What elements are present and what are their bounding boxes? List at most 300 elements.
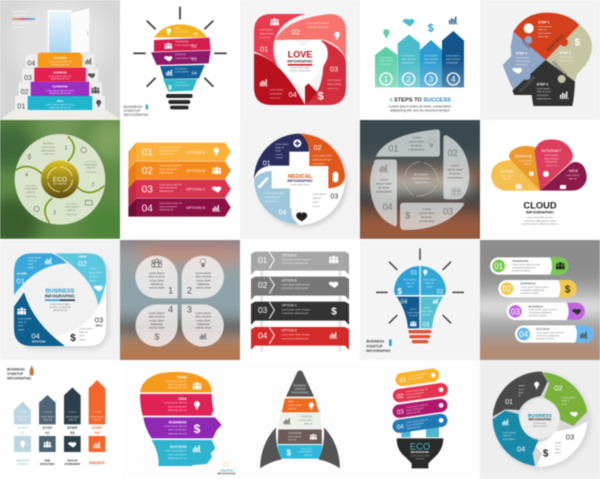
step 4 text: consectetur <box>516 63 528 66</box>
heart center: Lorem ipsum dolor <box>290 67 310 70</box>
band idea: IDEA <box>178 397 187 401</box>
ribbon B: amet consectetur <box>159 168 177 171</box>
ribbon D: amet consectetur <box>159 205 177 208</box>
bottom labels: INVESTORS <box>40 463 55 466</box>
capsule 04 <box>515 325 593 343</box>
option texts: dolor sit <box>68 209 76 212</box>
capsule 01: TEAMWORK <box>512 259 529 263</box>
petal 1: Lorem ipsum <box>149 271 165 275</box>
option texts: OPTION A <box>43 143 54 146</box>
segment 04: consectetur <box>376 190 392 194</box>
segment 05: Lorem ipsum <box>175 84 189 87</box>
lorem: consectetur <box>270 93 282 96</box>
segment 04 blue: amet adipis <box>503 438 515 441</box>
heading <box>12 10 35 29</box>
segment 03: $ <box>70 333 76 344</box>
step: business: Lorem ipsum dolor sit <box>49 75 71 78</box>
segment 02 <box>275 14 346 59</box>
pill 01: 01 <box>399 377 407 384</box>
arrow text: Lorem ipsum <box>446 55 460 58</box>
option texts: adipiscing <box>26 196 37 198</box>
quadrant 03: Lorem <box>423 307 430 310</box>
pill 04 <box>392 413 448 434</box>
segment 02 green: amet <box>562 403 567 406</box>
step 1 text: dolor sit <box>538 29 547 32</box>
panel: head stripes infographic <box>139 371 236 476</box>
section teamwork: Lorem ipsum <box>288 435 302 438</box>
quadrant 04: 04 <box>401 299 408 305</box>
ribbon C: adipiscing elit <box>159 190 174 193</box>
lorem: adipiscing elit sed do <box>307 26 329 29</box>
heading: adipiscing elit <box>53 309 67 312</box>
segment 01 navy: 01 <box>263 161 271 168</box>
section idea <box>282 398 319 412</box>
petal 1: conse ctetur <box>149 278 164 282</box>
segment 01: ipsum dolor <box>409 140 424 144</box>
arrow text: consectetur <box>402 61 414 64</box>
petal 1: 1 <box>168 285 173 295</box>
step numbers: 03 <box>24 75 32 82</box>
arrow base fade <box>375 60 464 87</box>
petal 2: conse ctetur <box>196 278 211 282</box>
segment 02 green: Lorem ipsum <box>562 396 575 399</box>
subtitle: eiusmod tempor incididunt ut labore et <box>522 223 559 226</box>
segment 02 <box>443 135 469 199</box>
capsule 01: Lorem ipsum dolor sit amet <box>512 263 540 266</box>
vertical bands <box>260 268 342 352</box>
option texts: OPTION C <box>66 203 78 205</box>
segment 03 <box>303 40 346 105</box>
labels: 03 <box>330 65 338 74</box>
arrow text: consectetur <box>446 61 458 64</box>
capsule 04: SUCCESS <box>536 327 550 331</box>
segment 01 dark: 01 <box>505 399 513 406</box>
arrow 1 <box>14 402 31 452</box>
lorem blocks: Lorem ipsum dolor <box>313 155 332 158</box>
lamp base: Lorem ipsum dolor <box>410 454 430 457</box>
petal 2: Lorem ipsum <box>196 271 212 275</box>
ribbon B: adipiscing elit <box>159 171 174 174</box>
capsule 02: EARNINGS <box>521 282 536 286</box>
lorem: dolor sit amet <box>327 83 342 86</box>
ring centre: INFOGRAPHIC <box>528 417 552 421</box>
arrow text: Lorem ipsum <box>402 55 415 58</box>
capsule 04: tincidunt ut labore <box>536 337 555 340</box>
capsule 03: BUSINESS <box>529 304 543 308</box>
capsule 03: tincidunt ut labore <box>529 315 548 318</box>
swirl separators <box>16 137 104 223</box>
capsule 01: 01 <box>494 262 504 271</box>
ribbon C <box>136 180 231 198</box>
step: teamwork <box>31 82 89 96</box>
pill 02: adipiscing elit <box>406 395 421 400</box>
panel: four steps to success: 3 <box>429 74 434 84</box>
ribbon C: consectetur adipiscing elit <box>282 312 309 315</box>
segment 03: IDEA <box>96 324 102 328</box>
segment 04: 04 <box>192 71 197 76</box>
arrow 4 <box>442 31 464 87</box>
quadrant step 2 <box>546 25 592 82</box>
segment 04: 04 <box>31 331 41 340</box>
step: idea <box>28 96 92 110</box>
segment 03: Lorem ipsum <box>79 327 93 330</box>
ribbon B <box>136 161 231 179</box>
lamp base: sit amet <box>416 457 424 460</box>
band success: amet, consectetur <box>168 453 187 456</box>
panel: four steps to success: 1 <box>384 74 389 84</box>
heart center: LOVE <box>288 50 312 60</box>
option texts: Lorem ipsum <box>84 163 97 166</box>
heading: 4 STEPS TO SUCCESS <box>389 97 451 103</box>
segment 04 blue: Lorem ipsum <box>503 431 516 434</box>
petal 2 <box>182 256 224 298</box>
step: business <box>34 68 86 82</box>
petal 1: adipiscing <box>151 282 163 286</box>
step 2 text: Lorem ipsum <box>559 56 573 59</box>
ribbon B: consectetur adipiscing elit <box>282 287 309 290</box>
step 1 text: STEP 1 <box>538 20 550 24</box>
panel: business cycle ring infographic <box>480 360 600 479</box>
ribbon C: 03 <box>142 185 153 196</box>
quadrant 02: Lorem ipsum <box>423 279 436 282</box>
puzzle tabs <box>523 36 568 83</box>
ribbon A: adipiscing elit <box>159 153 174 156</box>
icons <box>28 147 92 212</box>
segment 04: BUSINESS <box>175 68 187 70</box>
segment 02: TEAMWORK <box>175 41 189 44</box>
step 4 text: Lorem ipsum <box>516 57 529 60</box>
step 3 text: dolor sit amet <box>537 91 551 94</box>
bottom labels: SIGN AN <box>67 460 78 463</box>
ribbon C: 03 <box>258 305 268 315</box>
heart center: INFOGRAPHIC <box>287 60 313 64</box>
segment 03 <box>151 51 211 65</box>
bulb base <box>166 94 193 109</box>
segment 02 green: dolor sit <box>562 400 570 403</box>
step 2 text: STEP 2 <box>559 51 571 55</box>
band success: SUCCESS <box>170 445 187 449</box>
segment 02: 02 <box>78 259 87 268</box>
segment 02: 02 <box>192 44 197 49</box>
band business: adipiscing elit, sed <box>168 432 187 435</box>
labels: 02 <box>292 27 300 36</box>
diagonal labels: IDEA <box>521 39 532 50</box>
band success: Lorem ipsum dolor sit <box>164 450 187 453</box>
segment 03 white: 03 <box>566 432 574 441</box>
segment 03: dolor sit <box>79 331 88 334</box>
ribbon B <box>251 277 349 300</box>
nose: INFOGRAPHIC <box>291 391 309 394</box>
panel: business template on blurred photo <box>359 119 481 240</box>
icons: $ <box>575 37 581 48</box>
diagonal labels: BUSINESS <box>546 33 565 52</box>
segment 01 <box>154 24 207 37</box>
band business: $ <box>194 422 201 436</box>
option texts: dolor sit amet <box>41 149 56 152</box>
panel: rocket infographic <box>259 370 341 469</box>
option texts: adipiscing <box>43 154 54 156</box>
option texts: Lorem ipsum <box>42 146 55 149</box>
fins <box>260 427 340 468</box>
band business: Lorem ipsum dolor sit <box>164 425 187 428</box>
panel: business swirl infographic <box>0 240 120 360</box>
ring shadow <box>494 373 591 469</box>
lobe cloud: Lorem ipsum <box>500 175 513 178</box>
lorem blocks: nonum <box>276 157 283 159</box>
segment 02: consectetur <box>447 176 463 180</box>
segment 03: $ <box>405 211 411 221</box>
band team: adipiscing elit, sed <box>168 387 187 390</box>
arrow text: consectetur <box>379 63 392 66</box>
segment 02: THINK <box>78 254 88 258</box>
option texts <box>24 143 97 216</box>
heading: INFOGRAPHIC <box>526 209 554 214</box>
arrow text: dolor sit amet <box>402 58 416 61</box>
segment 01 <box>254 14 306 68</box>
translucent circle <box>15 134 105 225</box>
numbers: 3 <box>53 211 56 217</box>
ribbon A: OPTION A <box>282 253 297 257</box>
pill 01 <box>395 368 440 387</box>
lorem: adipiscing <box>327 88 338 90</box>
lamp connectors <box>401 427 439 437</box>
segment 04: 04 <box>383 202 393 212</box>
petal 2: dolor sit amet <box>195 275 212 279</box>
center cycle <box>404 162 438 196</box>
step 4 text <box>516 52 530 66</box>
arrow 2: Lorem ipsum <box>41 415 54 418</box>
lobe cloud <box>491 160 540 191</box>
petal 1: dolor sit amet <box>149 275 165 279</box>
section teamwork: dolor sit <box>288 439 297 442</box>
segment 03: Lorem <box>422 207 431 211</box>
capsule 02: Lorem ipsum dolor sit amet <box>521 286 549 289</box>
band idea <box>140 394 213 416</box>
circle shadow <box>257 137 347 227</box>
heading <box>287 174 313 187</box>
lorem blocks: Lorem ipsum <box>313 193 326 196</box>
quadrant 01: dolor sit <box>406 282 414 285</box>
ribbon A <box>136 143 231 161</box>
lobe service: dolor sit <box>523 163 532 166</box>
step 4 text: STEP 4 <box>516 52 527 56</box>
center text: BUSINESS <box>414 172 428 176</box>
segment 01 dark <box>493 372 548 417</box>
segment 04 blue: 04 <box>278 210 286 217</box>
pill 02 <box>392 382 449 403</box>
eco centre: INFOGRAPHIC <box>53 182 68 185</box>
segment 05 <box>163 79 197 92</box>
petal 4: Lorem ipsum <box>149 311 165 315</box>
pill 03: 03 <box>396 408 405 416</box>
label: INFOGRAPHIC <box>7 377 32 381</box>
ribbon C: OPTION C <box>186 187 205 192</box>
step icons <box>85 58 101 107</box>
heading: STARTUP <box>12 13 26 17</box>
quadrant step 1 <box>513 13 579 60</box>
petal 4: dolor sit amet <box>149 315 165 319</box>
diagonal labels: FINANCE <box>551 60 568 77</box>
segment 03: 03 <box>95 315 103 324</box>
ribbon B: OPTION B <box>186 168 205 173</box>
section success: SUCCESS <box>301 448 312 450</box>
heading: Lorem ipsum dolor <box>290 184 310 187</box>
segment 03: Lorem ipsum dolor <box>175 57 195 60</box>
segment 03: ipsum dolor <box>419 211 434 215</box>
band idea: amet, consectetur <box>168 405 187 408</box>
blurred background <box>470 230 600 370</box>
blurred background <box>350 113 490 247</box>
segment 01: 01 <box>388 144 398 154</box>
subtitle <box>389 105 452 113</box>
panel: four petals on sunset photo <box>119 239 241 361</box>
quadrant 03: 03 <box>423 323 430 329</box>
segment 04 blue: 04 <box>517 445 526 454</box>
option texts: OPTION D <box>25 185 37 187</box>
segment 01: amet <box>28 263 34 266</box>
section idea: IDEA <box>288 401 294 404</box>
segment 04 <box>370 159 397 226</box>
ribbon A: Lorem ipsum dolor sit <box>159 146 182 149</box>
segment 01 dark: dolor <box>518 391 524 394</box>
ribbon C <box>251 302 349 325</box>
lorem blocks: amet <box>276 150 281 153</box>
segment 03: consectetur <box>419 219 434 223</box>
subtitle: consectetur adipiscing elit, sed do <box>524 219 557 222</box>
subtitle: Lorem ipsum dolor sit amet, <box>527 216 554 219</box>
section idea: Lorem ipsum <box>288 404 302 407</box>
lobe web <box>540 162 587 191</box>
step 3 text: adipiscing elit <box>537 97 551 100</box>
ribbon C: Lorem ipsum dolor sit <box>159 183 182 186</box>
step numbers <box>17 61 35 111</box>
panel: capsule list <box>479 239 600 361</box>
capsule 02: $ <box>565 284 571 295</box>
petal 2: 2 <box>187 285 192 295</box>
ribbon B: 02 <box>142 166 153 177</box>
panel: staircase infographic <box>0 0 120 120</box>
ribbon C: $ <box>331 306 337 317</box>
label <box>124 105 149 117</box>
panel: cloud infographic <box>490 138 588 226</box>
step: business: BUSINESS <box>53 70 67 74</box>
subtitle: Lorem ipsum dolor sit amet, consectetur <box>389 105 452 109</box>
ribbon A: amet consectetur <box>159 149 177 152</box>
arrow 2: 02 <box>45 430 50 435</box>
petal 2: sed do eiusd <box>196 286 211 290</box>
capsule 03: consectetur adipiscing <box>529 312 552 315</box>
segment 02: adipis <box>89 280 96 282</box>
segment 02: Lorem <box>451 164 460 168</box>
lobe cloud: dolor sit <box>503 178 511 181</box>
segment 02 orange: 02 <box>314 145 322 152</box>
segment 02 <box>154 38 211 52</box>
segment 03 <box>400 203 464 230</box>
segment 02: Lorem <box>89 267 96 270</box>
capsule 03: 03 <box>511 307 520 316</box>
petal 4: adipiscing <box>151 322 163 326</box>
segment 03 white: dolor <box>555 448 560 451</box>
segment 04: Lorem ipsum <box>175 71 189 74</box>
arrow 4: TITLE D <box>93 411 102 413</box>
capsule 03 <box>507 303 585 320</box>
lobe web: WEB <box>569 168 578 173</box>
numbers: 1 <box>65 145 68 151</box>
numbers <box>25 145 95 217</box>
lobe web: Lorem ipsum <box>566 174 579 177</box>
segment 02: 02 <box>448 148 458 158</box>
panel: lightbulb infographic <box>123 6 228 117</box>
arrow 1: STEP <box>17 425 28 430</box>
arrow 3 <box>64 387 81 452</box>
lobe service: SERVICE <box>515 154 532 159</box>
step: teamwork: adipiscing elit sed do <box>49 92 72 95</box>
pill 02: 02 <box>396 393 405 401</box>
segment 01 <box>14 253 67 295</box>
heading: Lorem ipsum <box>12 26 26 29</box>
segment 01: Lorem ipsum <box>175 31 189 34</box>
ribbon B: 02 <box>258 280 268 290</box>
arrow 3: TITLE C <box>68 411 77 413</box>
center text <box>412 172 430 184</box>
shadow <box>17 257 109 349</box>
quadrant 02 <box>421 266 446 295</box>
heading: MEDICAL <box>288 174 313 180</box>
arrow 4: 04 <box>95 430 100 435</box>
quadrant 03: sit amet <box>423 313 431 316</box>
lorem: Lorem ipsum <box>270 89 284 92</box>
ribbon D: OPTION D <box>282 329 298 333</box>
bottom labels: PROFIT <box>89 461 105 466</box>
segment 03 white <box>533 422 587 467</box>
label: STARTUP <box>124 109 141 113</box>
segment 01: 01 <box>193 32 199 37</box>
quadrant 04: sit amet <box>409 315 418 318</box>
panel: head puzzle infographic <box>480 0 600 120</box>
bottom labels: AN IDEA <box>18 463 28 466</box>
segment 04 <box>160 65 205 79</box>
creative label <box>217 462 236 476</box>
lorem blocks: amet <box>313 201 318 204</box>
lorem blocks: adipiscing elit <box>265 196 279 199</box>
bottom labels: AGREEMENT <box>64 463 81 466</box>
segment 03: STARTUP <box>175 54 186 57</box>
lorem blocks: consectetur <box>313 163 325 166</box>
segment 01 dark: Lorem <box>518 385 525 388</box>
band idea: adipiscing elit, sed <box>168 409 187 412</box>
lobe cloud: CLOUD <box>500 169 514 174</box>
section startup: STARTUP <box>301 416 312 419</box>
heading: Lorem ipsum dolor <box>50 303 70 306</box>
section success: dolor sit <box>304 454 312 457</box>
pill 02: Lorem ipsum dolor sit <box>406 388 428 394</box>
segment 04: adipis <box>18 329 25 331</box>
lorem blocks: adipiscing elit sed <box>313 159 332 162</box>
band business: BUSINESS <box>169 420 187 424</box>
step: teamwork: TEAMWORK <box>52 85 68 89</box>
panel: four steps to success: 4 <box>451 74 456 84</box>
arrow 2: dolor sit <box>43 419 52 422</box>
arrow text <box>379 55 460 66</box>
lorem blocks: Lorem ipsum dolor <box>265 192 285 195</box>
band team: amet, consectetur <box>168 383 187 386</box>
step numbers: 04 <box>27 61 35 68</box>
eco centre <box>41 160 79 198</box>
segment 04 blue: dolor sit <box>503 435 511 438</box>
step: idea: IDEA <box>57 99 63 103</box>
panel: eco infographic on green photo <box>0 119 121 240</box>
capsule 02: tincidunt ut labore <box>521 292 540 295</box>
